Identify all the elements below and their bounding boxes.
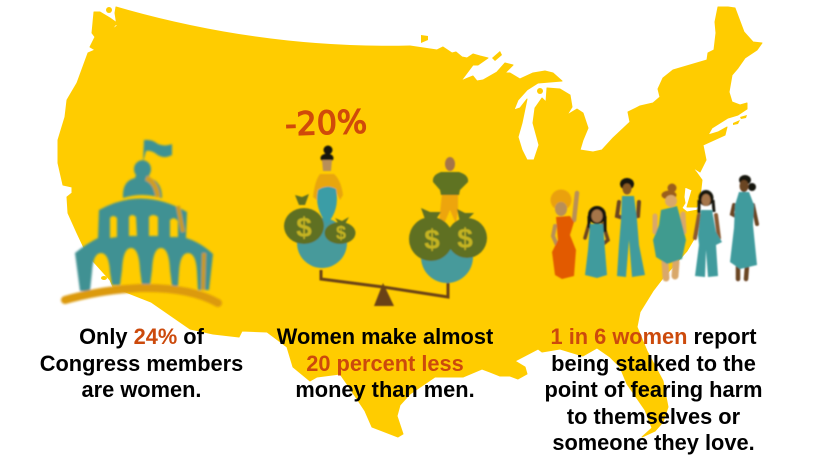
man on right side [433, 157, 468, 224]
woman in teal jumpsuit [617, 178, 645, 277]
map of the United States [58, 7, 762, 437]
text: stalking statistic: point of fearing harm [545, 377, 762, 402]
flag [143, 140, 172, 162]
icon: capitol building [65, 140, 218, 303]
text: stalking statistic: someone they love. [552, 430, 755, 455]
left globe [297, 218, 347, 268]
scale beam and fulcrum [321, 270, 448, 297]
dollar signs: $ [336, 223, 346, 243]
woman in orange dress [550, 190, 577, 279]
dollar signs: $ [424, 224, 440, 255]
woman in long teal dress [730, 175, 757, 279]
label: minus 20 percent: -20% [284, 103, 368, 143]
text: stalking statistic: being stalked to the [551, 351, 756, 376]
text: congress statistic: Only 24% of [79, 324, 204, 349]
text: congress statistic: Congress members [40, 351, 243, 376]
icon: group of six women [550, 175, 757, 279]
money bags [284, 194, 487, 261]
dollar signs: $ [457, 223, 473, 254]
capitol drum and lower colonnade [75, 198, 213, 291]
text: congress statistic: are women. [82, 377, 201, 402]
dollar signs [296, 212, 473, 255]
woman on left side [313, 146, 343, 224]
right globe [421, 231, 473, 283]
capitol dome [123, 160, 162, 198]
text: pay gap statistic: money than men. [295, 377, 475, 402]
woman in teal dress with braids [585, 206, 608, 278]
capitol base swoosh [65, 288, 218, 303]
text: stalking statistic: 1 in 6 women report [551, 324, 756, 349]
icon: balance scale with bags of money [284, 146, 487, 306]
text: pay gap statistic: Women make almost [277, 324, 493, 349]
woman in teal pants with long hair [695, 190, 722, 277]
text: pay gap statistic: 20 percent less [306, 351, 464, 376]
text: stalking statistic: to themselves or [567, 404, 741, 429]
dollar signs: $ [296, 212, 312, 243]
woman with hair bun [653, 184, 686, 278]
